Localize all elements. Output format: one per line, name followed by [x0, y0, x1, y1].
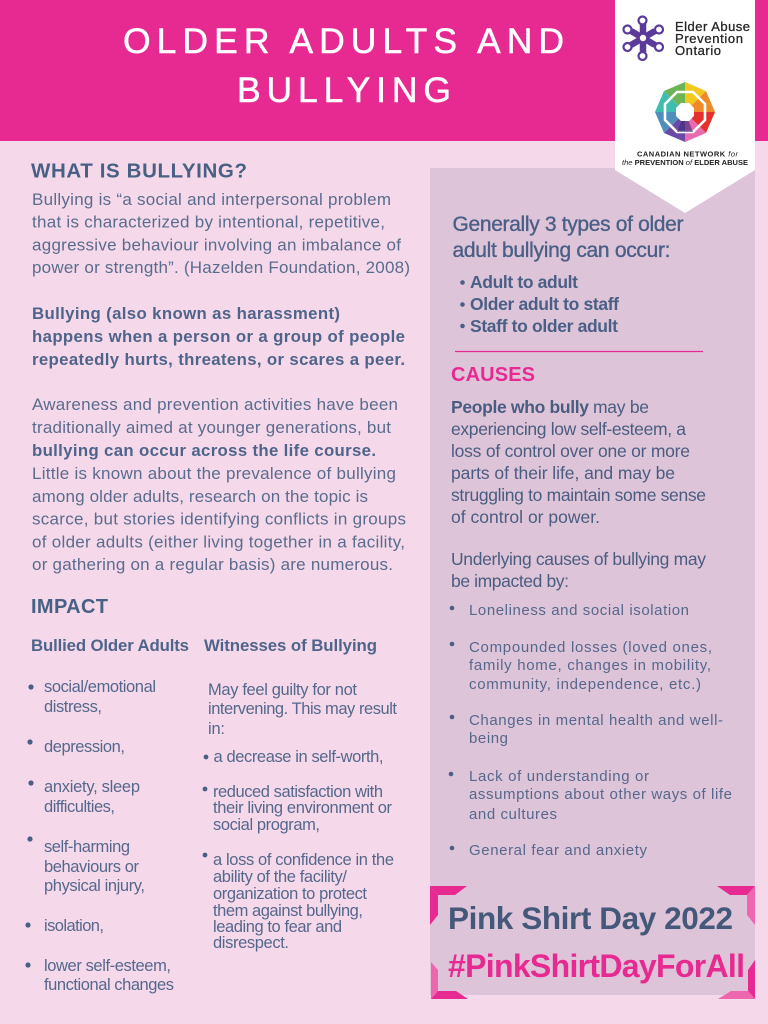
list: witness effects: a loss of confidence in the: [213, 851, 394, 869]
footer title: Pink Shirt Day 2022: [448, 900, 733, 936]
logo banner: [615, 0, 755, 213]
text: underlying causes: be impacted by:: [451, 571, 569, 591]
list: bullying types: Adult to adult: [470, 272, 578, 292]
title: [123, 21, 564, 110]
icon: octagon logo: [655, 82, 715, 142]
text: people who bully: may be: [593, 397, 649, 417]
list: bullied effects: functional changes: [44, 976, 174, 994]
subheading: witnesses of bullying: Witnesses of Bullying: [204, 636, 377, 655]
logo text: canadian network: CANADIAN NETWORK for: [637, 150, 738, 158]
list: underlying causes: [449, 602, 732, 859]
column: witnesses of bullying: [203, 636, 397, 952]
text: harassment: repeatedly hurts, threatens, or scares a peer.: [32, 350, 405, 369]
panel: types and causes: [430, 168, 755, 995]
text: people who bully: parts of their life, and may be: [451, 463, 675, 483]
text: awareness: or gathering on a regular basis) are numerous.: [32, 555, 393, 574]
list: underlying causes: Changes in mental health and well-: [469, 712, 723, 729]
list: witness effects: social program,: [213, 816, 320, 834]
heading: what is bullying: WHAT IS BULLYING?: [31, 160, 247, 182]
heading: impact: IMPACT: [31, 596, 108, 618]
text: people who bully: loss of control over one or more: [451, 441, 690, 461]
list: bullied effects: difficulties,: [44, 798, 115, 816]
text: definition: aggressive behaviour involving an imbalance of: [32, 236, 401, 254]
list: bullied effects: behaviours or: [44, 858, 140, 876]
logo text: canadian network: [622, 150, 748, 167]
text: witnesses intro: May feel guilty for not: [208, 681, 357, 699]
hashtag: #PinkShirtDayForAll: [448, 948, 745, 984]
text: harassment: Bullying (also known as harassment): [32, 304, 340, 323]
text: witnesses intro: intervening. This may result: [208, 700, 397, 718]
header banner: [0, 0, 768, 141]
text: people who bully: of control or power.: [451, 507, 600, 527]
text: definition: [32, 190, 410, 277]
list: bullying types: Staff to older adult: [470, 316, 618, 336]
text: definition: that is characterized by intentional, repetitive,: [32, 212, 385, 232]
list: bullied effects: social/emotional: [44, 678, 156, 696]
heading: types of bullying: [452, 213, 684, 262]
logo text: elder abuse prevention ontario: Ontario: [675, 43, 721, 58]
text: people who bully: experiencing low self-esteem, a: [451, 419, 686, 439]
list: underlying causes: and cultures: [469, 806, 557, 823]
list: underlying causes: General fear and anxiety: [469, 842, 648, 859]
list: witness effects: their living environment or: [213, 799, 392, 817]
text: definition: power or strength”. (Hazelden Foundation, 2008): [32, 258, 410, 277]
list: underlying causes: being: [469, 730, 508, 747]
text: harassment: happens when a person or a group of people: [32, 327, 405, 346]
text: people who bully: [451, 397, 706, 527]
heading: types of bullying: adult bullying can occur:: [452, 239, 670, 262]
list: witness effects: [203, 748, 394, 952]
title: OLDER ADULTS AND: [123, 21, 564, 61]
list: underlying causes: Compounded losses (loved ones,: [469, 639, 712, 656]
list: bullied effects: anxiety, sleep: [44, 778, 140, 796]
logo text: elder abuse prevention ontario: Prevention: [675, 31, 743, 46]
list: witness effects: ability of the facility/: [213, 868, 347, 886]
text: underlying causes: [451, 549, 706, 591]
list: witness effects: leading to fear and: [213, 918, 342, 936]
icon: elder abuse prevention ontario: [624, 16, 663, 60]
heading: causes: CAUSES: [451, 364, 535, 386]
subheading: bullied older adults: Bullied Older Adults: [31, 636, 189, 655]
text: underlying causes: Underlying causes of bullying may: [451, 549, 706, 569]
text: awareness: of older adults (either living together in a facility,: [32, 532, 405, 552]
list: witness effects: organization to protect: [213, 885, 367, 903]
list: underlying causes: Lack of understanding or: [469, 768, 649, 785]
list: underlying causes: community, independence, etc.): [469, 676, 701, 693]
list: underlying causes: family home, changes in mobility,: [469, 657, 711, 674]
list: bullied effects: isolation,: [44, 917, 104, 935]
list: witness effects: them against bullying,: [213, 902, 363, 920]
footer: pink shirt day: [430, 886, 755, 999]
list: bullying types: Older adult to staff: [470, 294, 619, 314]
list: witness effects: disrespect.: [213, 934, 289, 952]
text: people who bully: People who bully: [451, 397, 589, 417]
list: bullied effects: self-harming: [44, 838, 130, 856]
list: bullied effects: depression,: [44, 738, 125, 756]
list: bullied effects: lower self-esteem,: [44, 957, 171, 975]
text: awareness: [32, 395, 406, 574]
logo text: canadian network: the PREVENTION of ELDER ABUSE: [622, 158, 748, 167]
frame corners: [430, 886, 755, 999]
column: bullied older adults: [25, 636, 189, 994]
text: harassment: [32, 304, 405, 369]
text: witnesses intro: in:: [208, 720, 225, 738]
list: bullied effects: [25, 678, 174, 994]
list: bullied effects: physical injury,: [44, 877, 145, 895]
list: underlying causes: assumptions about other ways of life: [469, 786, 732, 803]
text: awareness: Awareness and prevention activities have been: [32, 395, 398, 414]
text: definition: Bullying is “a social and interpersonal problem: [32, 190, 391, 209]
text: awareness: among older adults, research on the topic is: [32, 487, 368, 506]
logo text: elder abuse prevention ontario: [675, 19, 750, 58]
text: awareness: bullying can occur across the life course.: [32, 441, 376, 460]
list: witness effects: a decrease in self-worth,: [214, 748, 384, 766]
text: awareness: Little is known about the prevalence of bullying: [32, 464, 396, 483]
list: underlying causes: Loneliness and social isolation: [469, 602, 689, 619]
text: awareness: traditionally aimed at younger generations, but: [32, 418, 391, 437]
list: bullied effects: distress,: [44, 698, 102, 716]
logo text: elder abuse prevention ontario: Elder Abuse: [675, 19, 750, 34]
title: BULLYING: [237, 70, 451, 110]
list: bullying types: [460, 272, 619, 336]
text: witnesses intro: [208, 681, 397, 738]
heading: types of bullying: Generally 3 types of older: [452, 213, 684, 236]
text: awareness: scarce, but stories identifying conflicts in groups: [32, 510, 406, 528]
text: people who bully: struggling to maintain some sense: [451, 485, 706, 505]
list: witness effects: reduced satisfaction with: [213, 783, 383, 801]
